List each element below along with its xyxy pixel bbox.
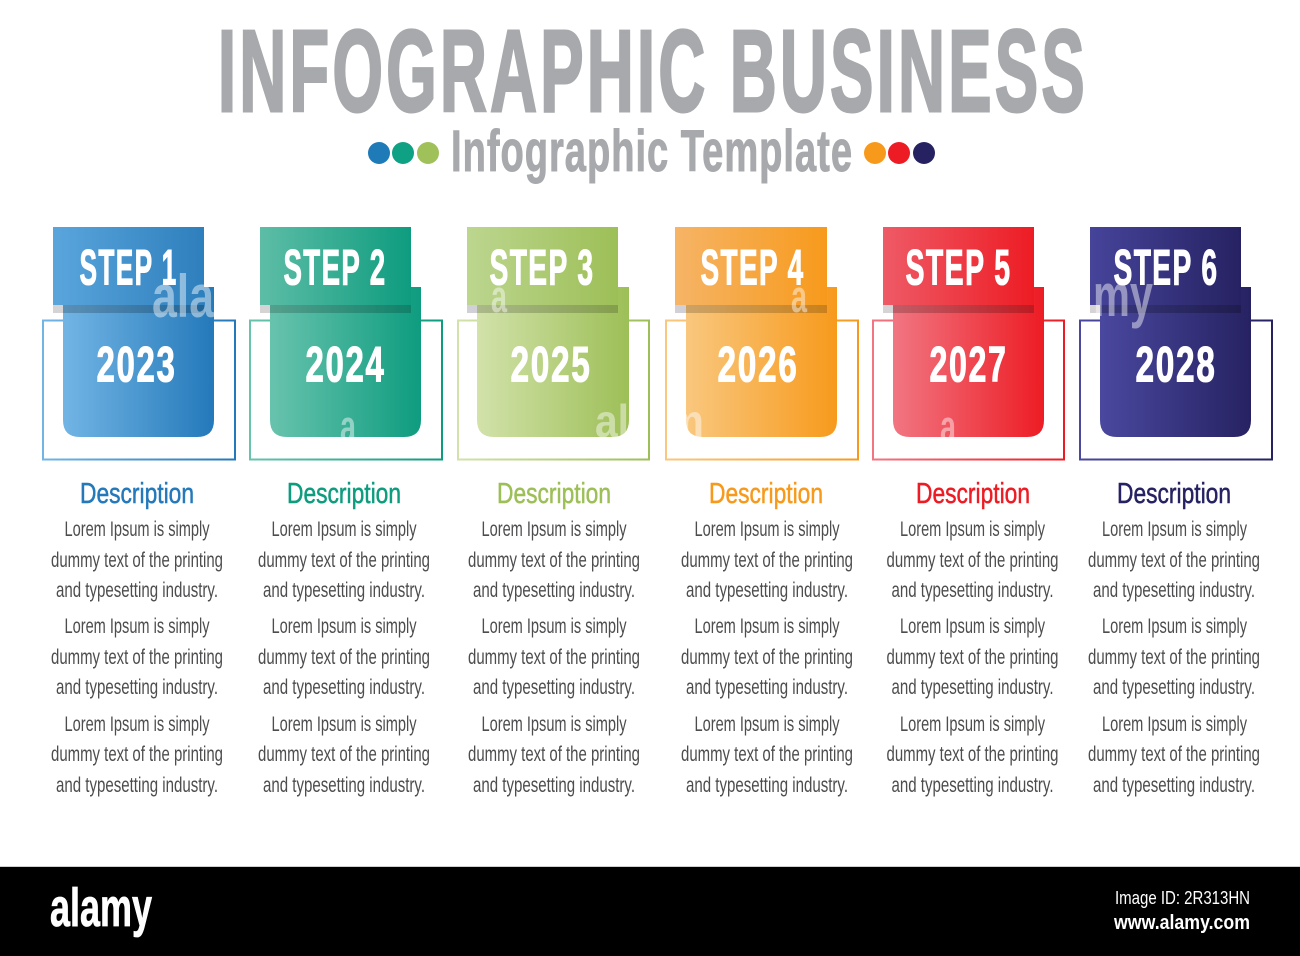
text block: step 1 description: and typesetting industry. [56,774,218,797]
text block: step 1 description: dummy text of the printing [51,646,223,669]
text block: step 6 description: Description [1117,478,1231,510]
text block: step 1 description: dummy text of the printing [51,549,223,572]
panel: step 1 badge: STEP 1 [80,240,178,296]
panel: step 3 badge: STEP 3 [490,240,594,296]
text block: step 1 description: and typesetting industry. [56,579,218,602]
text block: step 3 description: Lorem Ipsum is simply [482,518,627,541]
text block: step 3 description: and typesetting industry. [473,774,635,797]
text block: step 5 description: dummy text of the printing [886,646,1058,669]
panel: step 4 badge: m [666,395,704,447]
text block: step 6 description [1088,478,1260,797]
panel: step 2 badge: a [340,401,357,452]
text block: step 3 description: Lorem Ipsum is simply [482,615,627,638]
text block: step 3 description: dummy text of the printing [468,646,640,669]
panel: step 4 badge [666,227,858,460]
text block: step 1 description: Lorem Ipsum is simply [64,713,210,736]
decorative dots left [368,142,439,164]
panel: step 5 badge: 2027 [930,336,1008,392]
text block: step 5 description [886,478,1058,797]
text block: step 5 description: dummy text of the printing [886,549,1058,572]
subtitle: Infographic Template [451,119,853,184]
text block: step 4 description: dummy text of the printing [681,646,853,669]
panel: step 3 badge [458,227,649,460]
text block: step 3 description: dummy text of the printing [468,549,640,572]
panel: step 2 badge: 2024 [306,336,386,392]
text block: step 2 description: Description [287,478,401,510]
text block: step 3 description [468,478,640,797]
text block: step 4 description: Lorem Ipsum is simply [694,713,840,736]
text block: step 2 description: dummy text of the printing [258,646,430,669]
panel: step 3 badge: 2025 [510,336,592,392]
text block: step 5 description: dummy text of the printing [886,743,1058,766]
text block: step 3 description: Lorem Ipsum is simply [482,713,627,736]
footer website: www.alamy.com [1113,912,1250,934]
text block: step 4 description: dummy text of the printing [681,743,853,766]
footer image id: Image ID: 2R313HN [1115,888,1250,908]
panel: step 4 badge: STEP 4 [700,240,804,296]
panel: step 6 badge: 2028 [1136,336,1216,392]
text block: step 3 description: Description [497,478,611,510]
decorative dots right [864,142,935,164]
text block: step 2 description: Lorem Ipsum is simply [272,518,417,541]
text block: step 2 description: dummy text of the printing [258,549,430,572]
panel: step 3 badge: al [595,395,629,447]
text block: step 5 description: Lorem Ipsum is simply [900,518,1045,541]
text block: step 2 description: and typesetting industry. [263,579,425,602]
text block: step 4 description: and typesetting industry. [686,774,848,797]
text block: step 5 description: Description [916,478,1030,510]
text block: step 2 description: Lorem Ipsum is simply [272,615,417,638]
text block: step 4 description: Description [709,478,823,510]
panel: step 1 badge: ala [152,263,214,330]
text block: step 5 description: and typesetting industry. [892,774,1054,797]
panel: step 5 badge: STEP 5 [906,240,1012,296]
panel: step 5 badge: a [940,401,957,452]
text block: step 2 description [258,478,430,797]
panel: step 1 badge: 2023 [96,336,176,392]
text block: step 3 description: and typesetting industry. [473,676,635,699]
text block: step 4 description [681,478,853,797]
panel: step 5 badge [873,227,1064,460]
text block: step 2 description: Lorem Ipsum is simply [272,713,417,736]
panel: step 1 badge [43,227,235,460]
text block: step 1 description: dummy text of the printing [51,743,223,766]
text block: step 1 description: Lorem Ipsum is simply [64,518,210,541]
text block: step 2 description: dummy text of the printing [258,743,430,766]
footer logo: alamy [50,878,152,938]
panel: step 4 badge: a [791,271,808,322]
panel: step 6 badge [1080,227,1272,460]
text block: step 3 description: and typesetting industry. [473,579,635,602]
text block: step 4 description: Lorem Ipsum is simply [694,615,840,638]
panel: step 3 badge: a [491,271,508,322]
text block: step 2 description: and typesetting industry. [263,774,425,797]
text block: step 4 description: and typesetting industry. [686,579,848,602]
text block: step 5 description: Lorem Ipsum is simply [900,713,1045,736]
panel: step 2 badge: STEP 2 [284,240,386,296]
text block: step 3 description: dummy text of the printing [468,743,640,766]
text block: step 2 description: and typesetting industry. [263,676,425,699]
text block: step 1 description [51,478,223,797]
panel: step 6 badge: my [1093,262,1153,329]
panel: step 6 badge: STEP 6 [1114,240,1218,296]
text block: step 5 description: Lorem Ipsum is simply [900,615,1045,638]
text block: step 1 description: Description [80,478,194,510]
text block: step 4 description: dummy text of the printing [681,549,853,572]
text block: step 4 description: Lorem Ipsum is simply [694,518,840,541]
text block: step 1 description: and typesetting industry. [56,676,218,699]
text block: step 1 description: Lorem Ipsum is simply [64,615,210,638]
panel: step 4 badge: 2026 [718,336,798,392]
footer bar [0,866,1300,956]
text block: step 5 description: and typesetting industry. [892,579,1054,602]
text block: step 5 description: and typesetting industry. [892,676,1054,699]
text block: step 4 description: and typesetting industry. [686,676,848,699]
panel: step 2 badge [250,227,442,460]
